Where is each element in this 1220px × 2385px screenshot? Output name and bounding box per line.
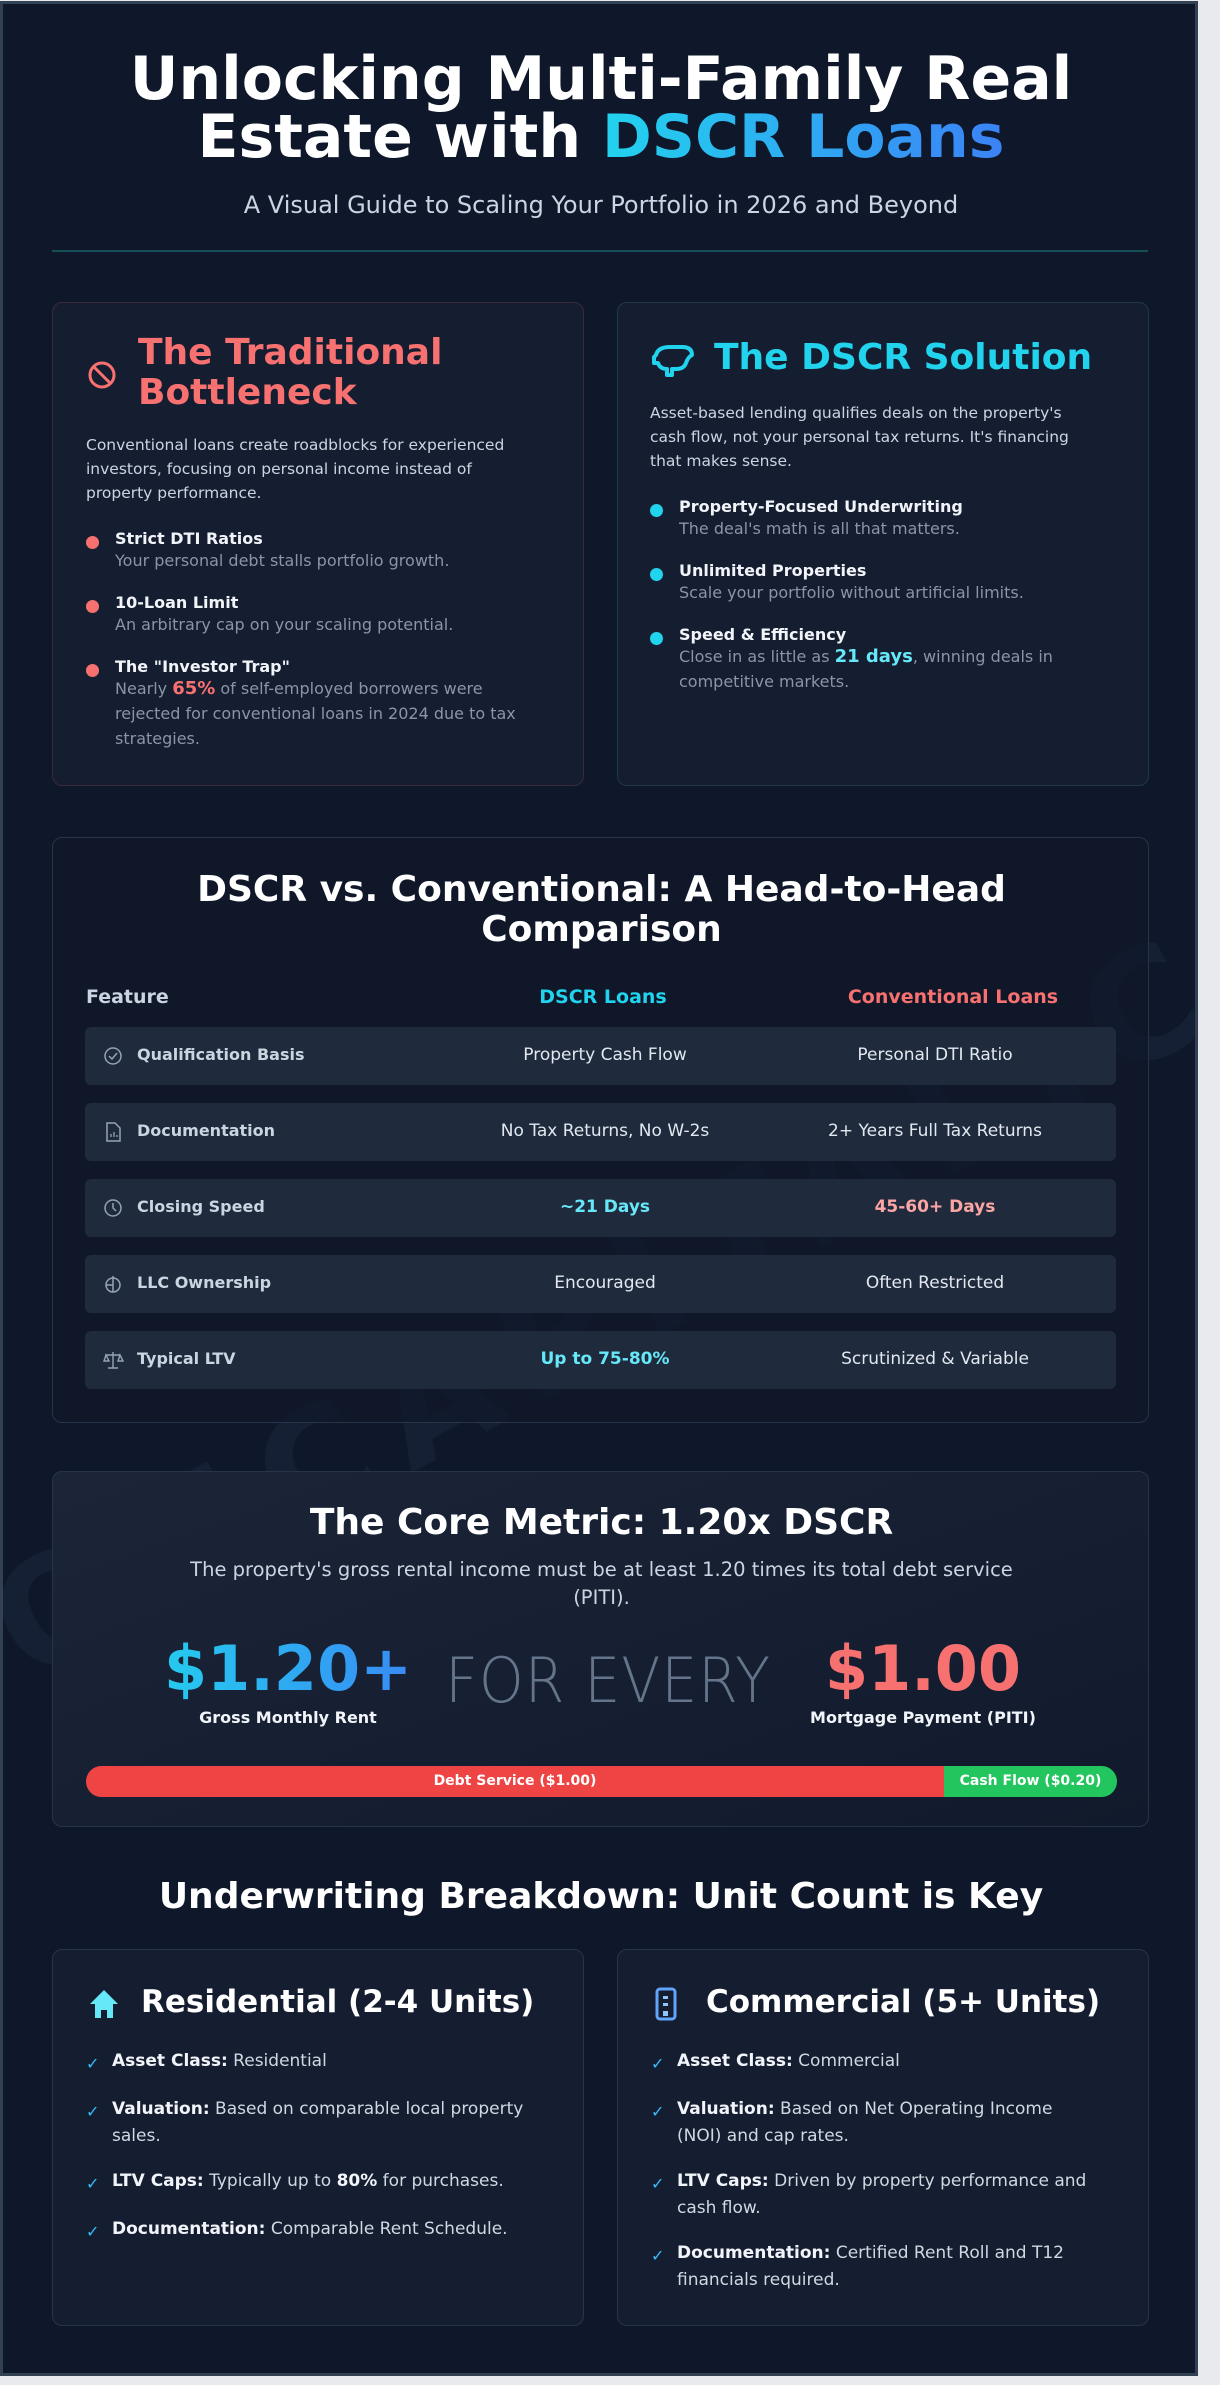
row: closing speed: Closing Speed	[137, 1197, 265, 1216]
metric: 1.20: $1.20+	[164, 1632, 412, 1705]
row: qualification: Personal DTI Ratio	[857, 1045, 1013, 1065]
bullet: 10-loan limit	[86, 593, 453, 634]
heading: Bottleneck	[138, 372, 357, 413]
row: LLC	[85, 1255, 1116, 1313]
panel: residential: ✓	[86, 2054, 99, 2073]
column headers: DSCR Loans	[539, 986, 667, 1008]
column headers	[86, 986, 1058, 1008]
bullet: strict DTI: Your personal debt stalls portfolio growth.	[115, 551, 449, 570]
bullet: strict DTI: Strict DTI Ratios	[115, 529, 263, 548]
panel: commercial: ✓	[651, 2102, 664, 2121]
panel: commercial: ✓	[651, 2246, 664, 2265]
metric: 1.00: $1.00	[825, 1632, 1021, 1705]
row: LTV: Scrutinized & Variable	[841, 1349, 1029, 1369]
list: LTV Caps: Typically up to 80% for purchases.	[112, 2171, 504, 2191]
list: Valuation: Based on comparable local property sales.	[112, 2099, 523, 2146]
row: qualification: Qualification Basis	[137, 1045, 305, 1064]
heading: DSCR vs. Conventional: A Head-to-Head	[197, 869, 1006, 910]
icon: building	[656, 1988, 676, 2020]
panel: comparison table	[52, 837, 1149, 1423]
heading: underwriting: Underwriting Breakdown: Unit Count is Key	[159, 1876, 1043, 1917]
panel: residential: ✓	[86, 2222, 99, 2241]
bullet: 10-loan limit: An arbitrary cap on your scaling potential.	[115, 615, 453, 634]
bar chart	[86, 1766, 1117, 1797]
panel: traditional bottleneck	[52, 302, 584, 786]
icon: house	[90, 1990, 118, 2018]
heading	[197, 869, 1006, 950]
list	[86, 2051, 523, 2241]
row: documentation: 2+ Years Full Tax Returns	[828, 1121, 1042, 1141]
list: Documentation: Certified Rent Roll and T12 financials required.	[677, 2243, 1064, 2290]
panel: residential: ✓	[86, 2102, 99, 2121]
icon: prohibited	[88, 362, 116, 388]
bullet: speed	[650, 625, 1053, 691]
bullet: property-focused	[650, 497, 963, 538]
list: Documentation: Comparable Rent Schedule.	[112, 2219, 508, 2239]
heading: Comparison	[481, 909, 722, 950]
heading: Commercial (5+ Units)	[706, 1984, 1100, 2020]
row: LTV	[85, 1331, 1116, 1389]
intro text: Asset-based lending qualifies deals on the property's cash flow, not your personal tax returns. It's financing that makes sense.	[650, 404, 1069, 470]
row: qualification: Property Cash Flow	[523, 1045, 687, 1065]
bullet: speed: Close in as little as 21 days, winning deals in competitive markets.	[679, 646, 1053, 691]
panel: commercial	[617, 1949, 1149, 2326]
metric: 1.00	[810, 1632, 1036, 1727]
heading: Residential (2-4 Units)	[141, 1984, 534, 2020]
row: documentation: No Tax Returns, No W-2s	[501, 1121, 709, 1141]
heading: The Core Metric: 1.20x DSCR	[310, 1502, 893, 1543]
row: LLC: Encouraged	[554, 1273, 656, 1293]
heading: The Traditional	[138, 332, 442, 373]
list: LTV Caps: Driven by property performance and cash flow.	[677, 2171, 1086, 2218]
metric: 1.00: Mortgage Payment (PITI)	[810, 1708, 1036, 1727]
for every: FOR EVERY	[445, 1644, 771, 1717]
column headers: Conventional Loans	[848, 986, 1058, 1008]
bullet: unlimited	[650, 561, 1024, 602]
title: Estate with DSCR Loans	[198, 102, 1004, 172]
row: qualification	[85, 1027, 1116, 1085]
panel: commercial: ✓	[651, 2054, 664, 2073]
list	[651, 2051, 1086, 2290]
panel: commercial: ✓	[651, 2174, 664, 2193]
bullet: speed: Speed & Efficiency	[679, 625, 846, 644]
metric: 1.20: Gross Monthly Rent	[199, 1708, 377, 1727]
panel: residential	[52, 1949, 584, 2326]
subtitle: A Visual Guide to Scaling Your Portfolio in 2026 and Beyond	[244, 191, 958, 219]
row: closing speed: ~21 Days	[560, 1197, 650, 1217]
row: documentation	[85, 1103, 1116, 1161]
bullet: strict DTI	[86, 529, 449, 570]
icon: piggy	[652, 345, 694, 377]
column headers: Feature	[86, 986, 169, 1008]
heading	[138, 332, 442, 413]
bullet: investor trap: The "Investor Trap"	[115, 657, 290, 676]
panel: core metric	[52, 1471, 1149, 1827]
heading: The DSCR Solution	[714, 337, 1092, 378]
row: LLC: LLC Ownership	[137, 1273, 271, 1292]
row: LLC: Often Restricted	[866, 1273, 1004, 1293]
bullet: 10-loan limit: 10-Loan Limit	[115, 593, 238, 612]
row: LTV: Typical LTV	[137, 1349, 236, 1368]
panel: residential: ✓	[86, 2174, 99, 2193]
row: documentation: Documentation	[137, 1121, 275, 1140]
list: Asset Class: Residential	[112, 2051, 327, 2071]
bullet: property-focused: Property-Focused Underwriting	[679, 497, 963, 516]
bullet: unlimited: Scale your portfolio without artificial limits.	[679, 583, 1024, 602]
description: The property's gross rental income must be at least 1.20 times its total debt service (PITI).	[190, 1558, 1013, 1609]
row: LTV: Up to 75-80%	[540, 1349, 670, 1369]
intro text: Conventional loans create roadblocks for experienced investors, focusing on personal income instead of property performance.	[86, 436, 504, 502]
title	[130, 44, 1072, 172]
title: Unlocking Multi-Family Real	[130, 44, 1072, 114]
bar chart: Debt Service ($1.00)	[434, 1773, 596, 1789]
bullet: property-focused: The deal's math is all that matters.	[679, 519, 960, 538]
row: closing speed	[85, 1179, 1116, 1237]
panel: DSCR solution	[617, 302, 1149, 786]
bullet: unlimited: Unlimited Properties	[679, 561, 866, 580]
row: closing speed: 45-60+ Days	[875, 1197, 995, 1217]
list: Valuation: Based on Net Operating Income (NOI) and cap rates.	[677, 2099, 1052, 2146]
bullet: investor trap: Nearly 65% of self-employed borrowers were rejected for conventional loans in 2024 due to tax strategies.	[115, 678, 516, 748]
list: Asset Class: Commercial	[677, 2051, 900, 2071]
bar chart: Cash Flow ($0.20)	[960, 1773, 1101, 1789]
